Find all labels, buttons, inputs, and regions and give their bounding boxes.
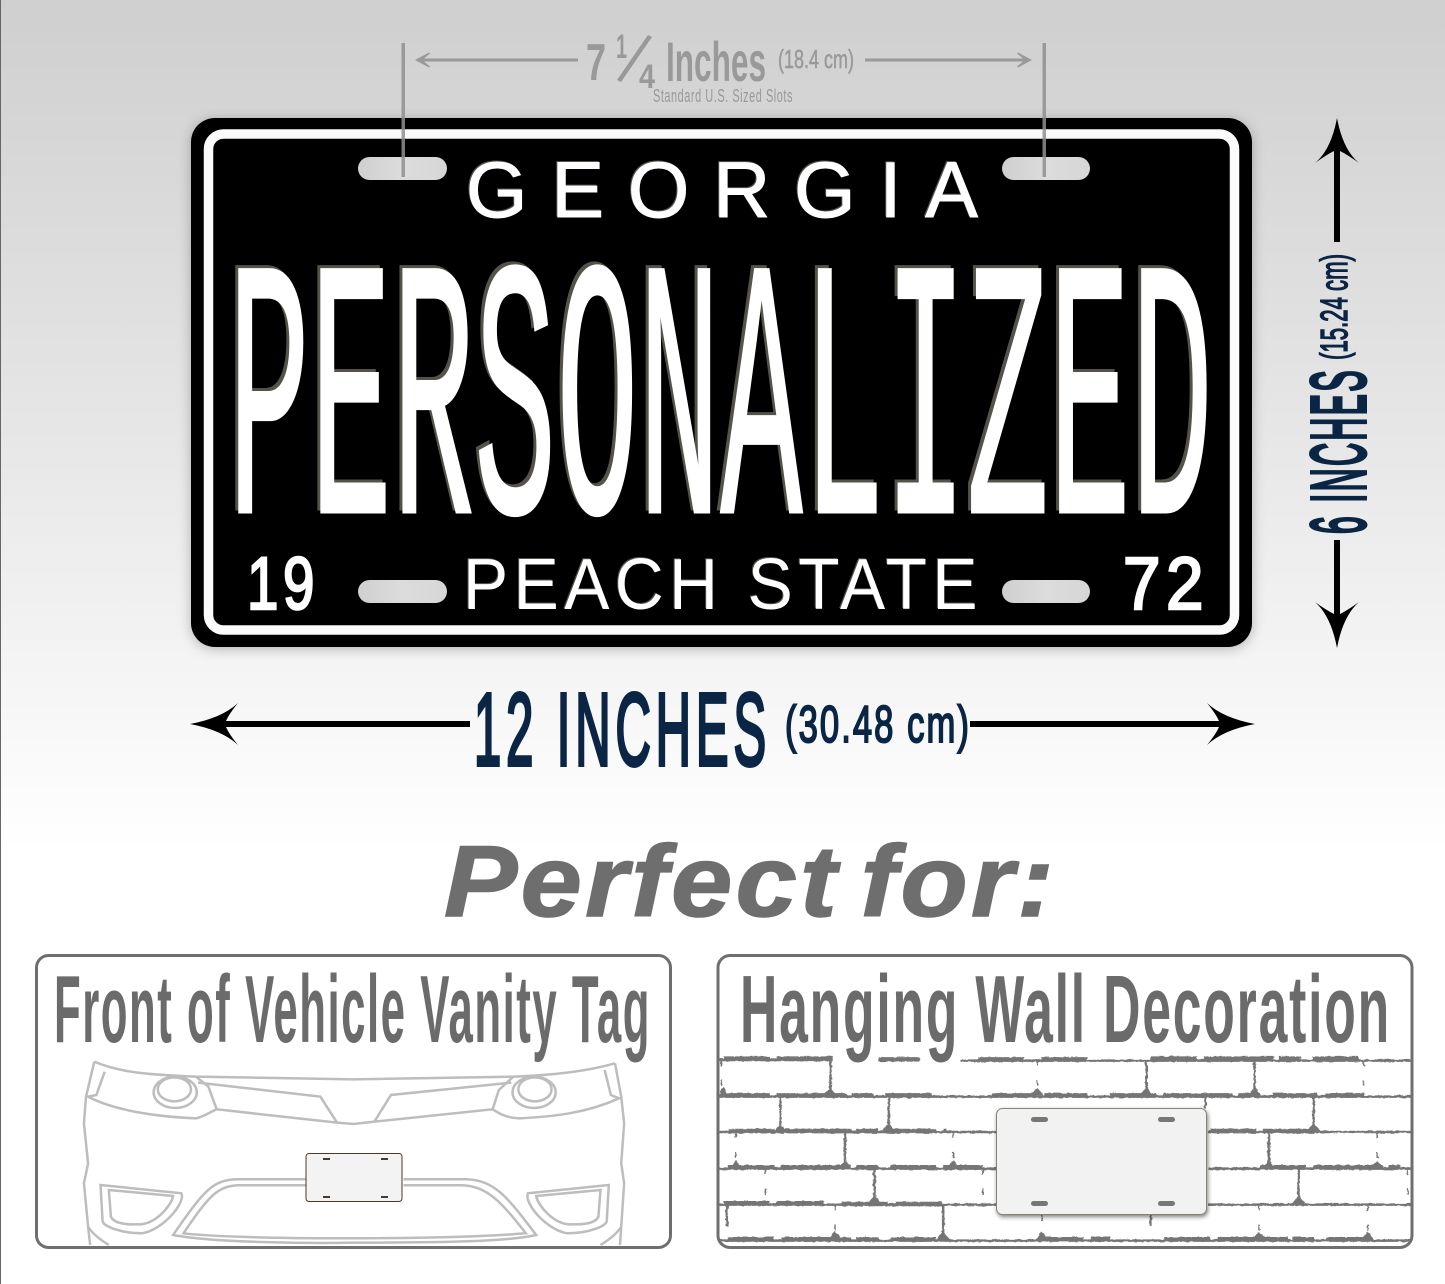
arrow left: [415, 52, 578, 68]
illustration: brick wall: [719, 1059, 1414, 1241]
panel: wall: [718, 956, 1414, 1248]
slogan: PEACH STATE: [463, 545, 983, 625]
measurement label: Inches: [666, 30, 766, 93]
measurement fraction: 4: [639, 58, 655, 96]
heading: Perfect for:: [444, 826, 1057, 938]
width centimeters: (30.48 cm): [785, 696, 971, 754]
text: Front of Vehicle Vanity Tag: [54, 956, 651, 1063]
state name: GEORGIA: [466, 145, 978, 234]
slot width measurement: [402, 28, 1046, 177]
arrow right: [970, 703, 1255, 745]
arrow up: [1315, 118, 1359, 242]
icon: car front outline: [84, 1062, 624, 1245]
measurement fraction: 1: [616, 28, 627, 66]
measurement fraction: 7: [586, 34, 606, 92]
icon: small blank plate: [306, 1154, 402, 1202]
arrow right: [865, 52, 1032, 68]
mounting slots: [358, 157, 1090, 603]
license plate: [191, 118, 1252, 647]
slot guide lines: [402, 43, 1046, 177]
plate body: [191, 118, 1252, 647]
year right: 72: [1123, 542, 1209, 625]
arrow down: [1315, 540, 1359, 648]
measurement centimeters: (18.4 cm): [778, 44, 854, 74]
panel frame: [718, 956, 1412, 1248]
height centimeters: (15.24 cm): [1314, 254, 1356, 360]
panel: vehicle: [36, 956, 670, 1248]
panel frame: [36, 956, 670, 1248]
measurement fraction: [586, 28, 655, 96]
standard slots note: Standard U.S. Sized Slots: [653, 86, 793, 106]
year left: 19: [247, 542, 319, 625]
plate white border: [208, 134, 1234, 630]
width dimension: 12 INCHES: [474, 672, 771, 787]
height dimension: 6 INCHES: [1296, 368, 1382, 534]
arrow left: [190, 703, 470, 745]
icon: blank plate on wall: [996, 1108, 1206, 1214]
width dimension: [190, 672, 1255, 787]
